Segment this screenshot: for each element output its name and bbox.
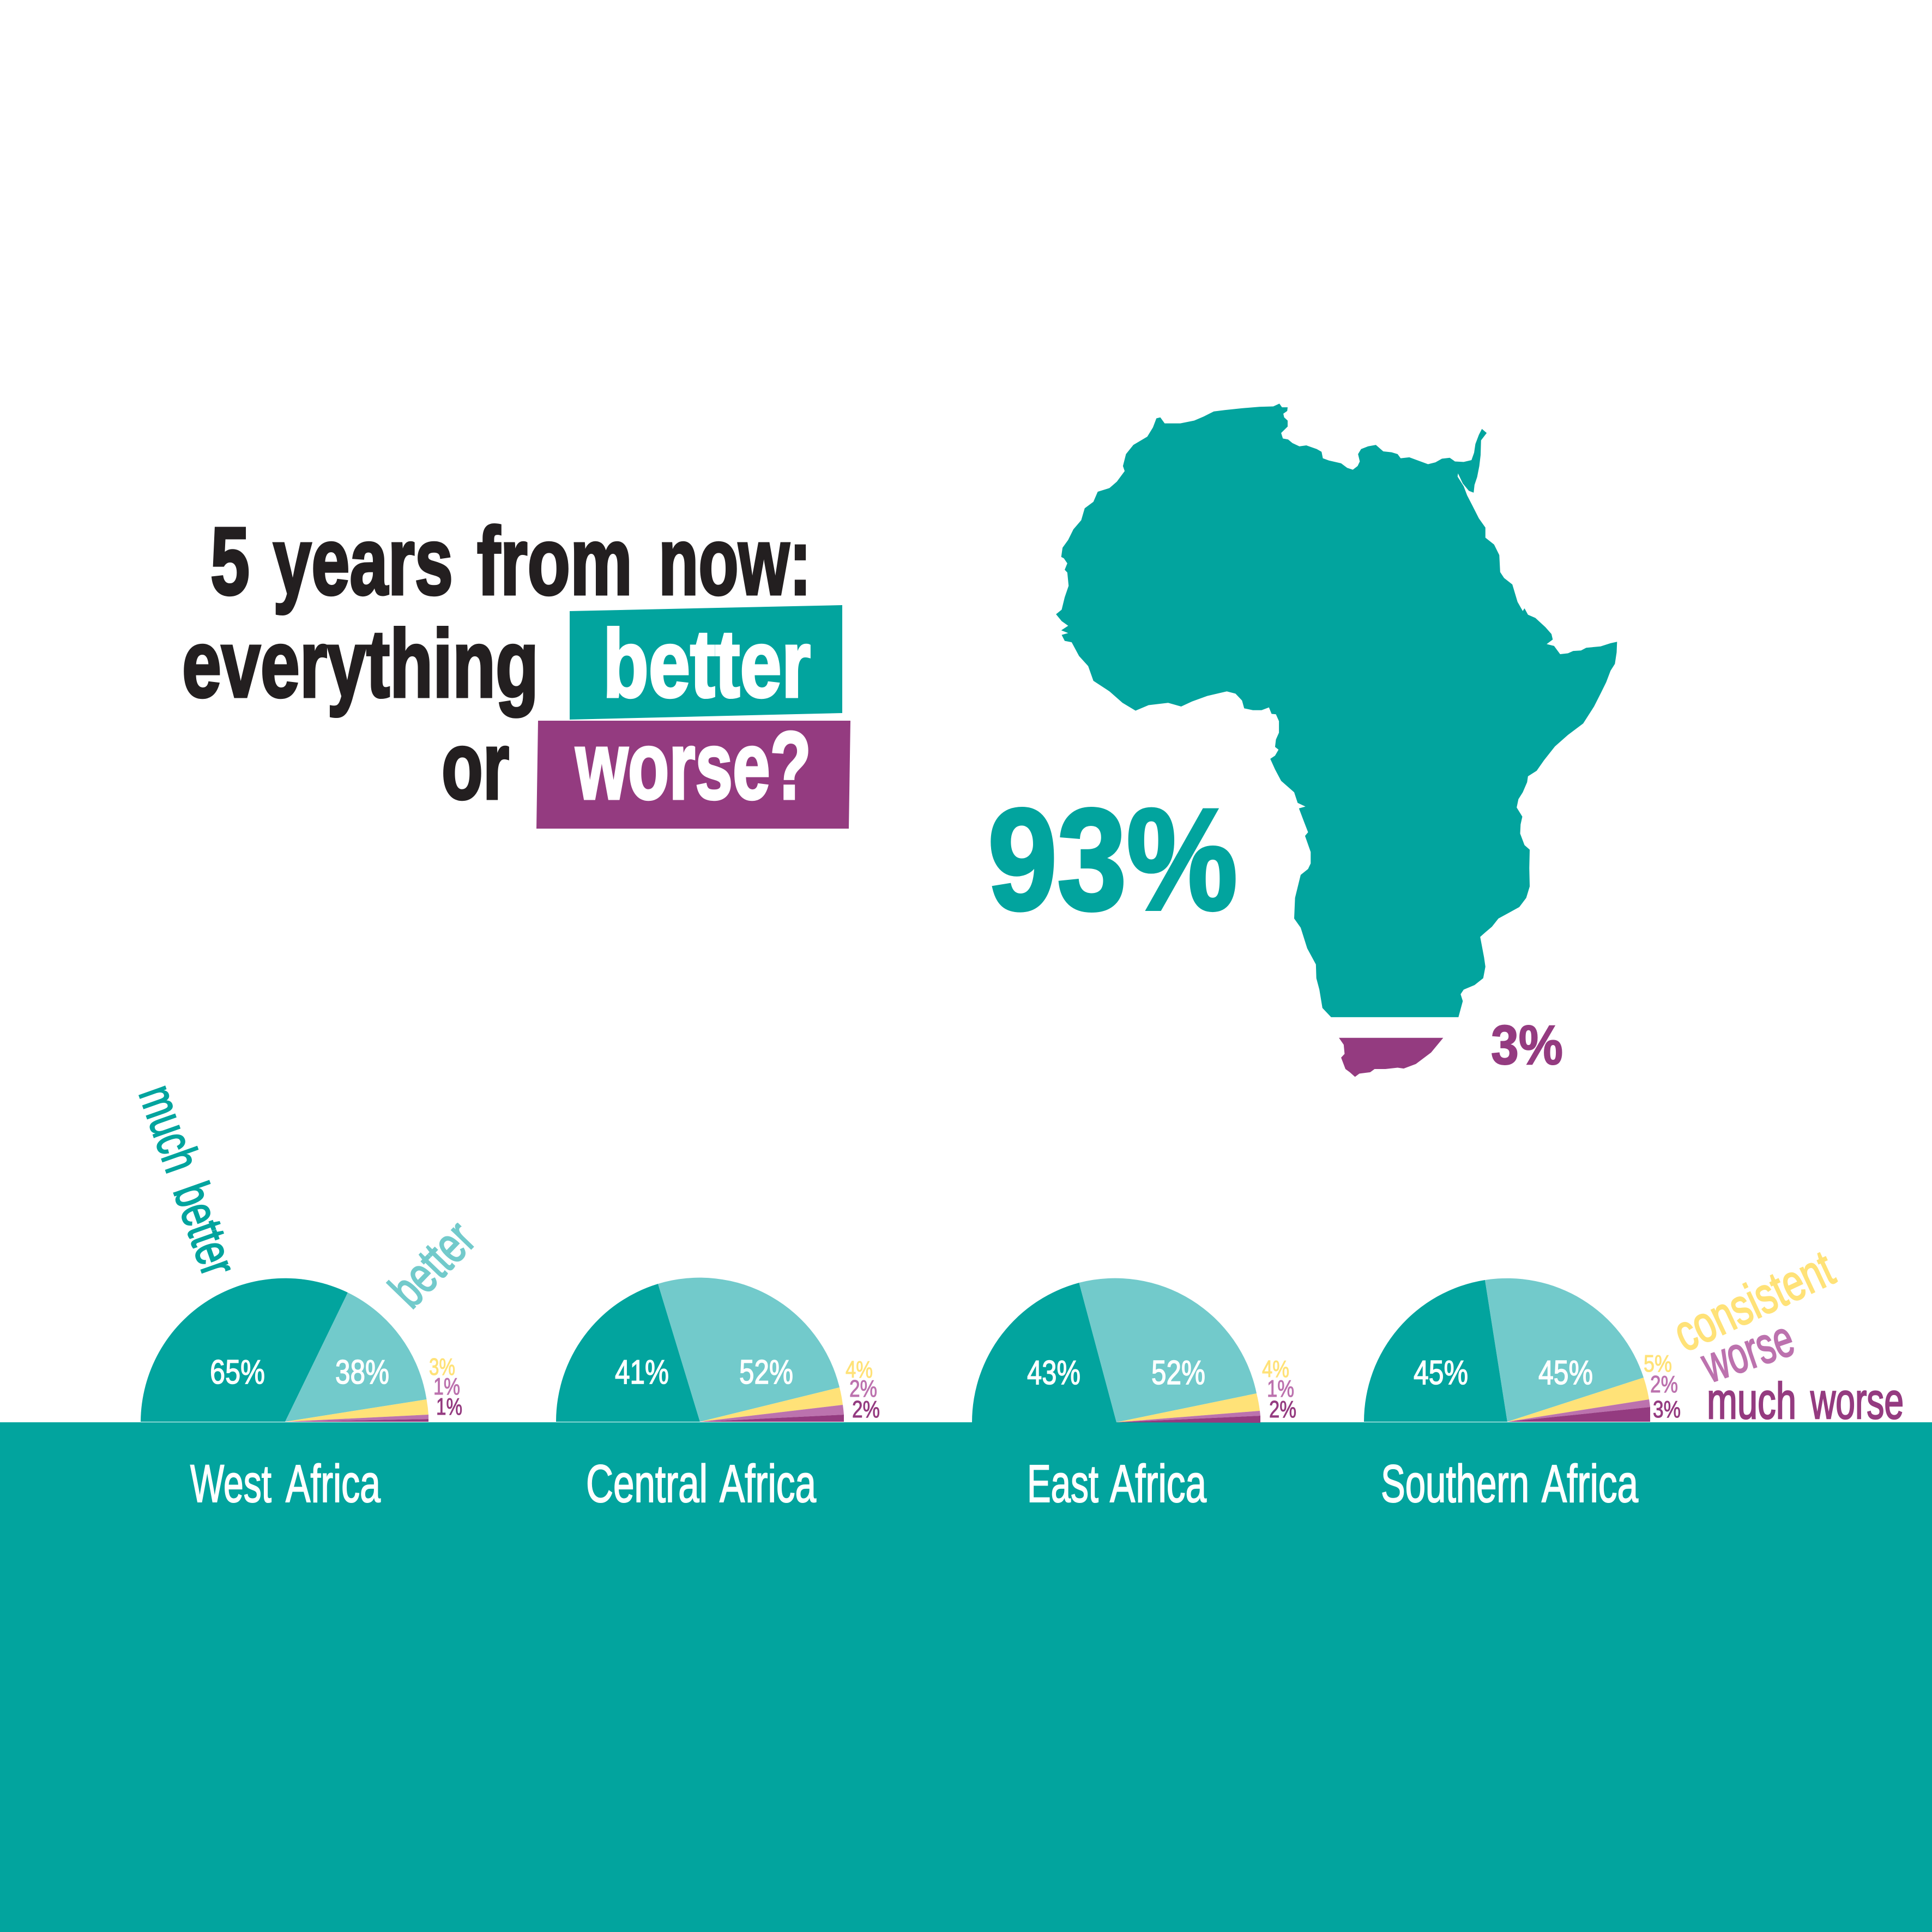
teal ground panel bbox=[0, 1422, 1932, 1932]
legend: consistent: consistent bbox=[1665, 1239, 1842, 1362]
region: Southern Africa: Africa bbox=[1542, 1454, 1638, 1513]
region: East Africa: East bbox=[1027, 1454, 1098, 1513]
pie chart: East Africa bbox=[972, 1278, 1296, 1423]
pie chart: East Africa: 1% bbox=[1267, 1375, 1294, 1402]
pie chart: West Africa: 1% bbox=[436, 1393, 462, 1420]
pie chart: Central Africa: 2% bbox=[852, 1396, 880, 1423]
stat: 93% better: 93% bbox=[988, 779, 1237, 940]
pie chart: East Africa: 4% bbox=[1262, 1356, 1289, 1382]
pie chart: Southern Africa: 3% bbox=[1653, 1396, 1681, 1423]
title line 1: now: bbox=[659, 508, 811, 615]
region: Southern Africa: Southern bbox=[1381, 1454, 1529, 1513]
pie chart: East Africa: 43% bbox=[1027, 1354, 1080, 1392]
pie chart: Southern Africa: 5% bbox=[1644, 1350, 1672, 1377]
title line 1: years bbox=[273, 508, 453, 615]
title line 1: 5 bbox=[210, 508, 250, 615]
legend: much better: better bbox=[163, 1175, 248, 1283]
pie chart: West Africa bbox=[141, 1278, 462, 1422]
pie chart: Central Africa: 52% bbox=[739, 1354, 793, 1391]
map: teal Africa 93% bbox=[1056, 403, 1617, 1017]
region: West Africa: West bbox=[190, 1454, 271, 1513]
title word: everything: everything bbox=[182, 611, 539, 717]
region: Central Africa: Central bbox=[586, 1454, 708, 1513]
pie chart: West Africa: 3% bbox=[429, 1354, 455, 1380]
pie chart: Southern Africa: 2% bbox=[1650, 1371, 1678, 1398]
region: East Africa bbox=[1027, 1454, 1206, 1513]
region: Central Africa: Africa bbox=[720, 1454, 816, 1513]
pie chart: Central Africa: 41% bbox=[615, 1354, 669, 1391]
pie chart: Southern Africa: 45% bbox=[1414, 1354, 1468, 1392]
pie chart: West Africa: 1% bbox=[433, 1373, 460, 1400]
region labels bbox=[190, 1454, 1638, 1513]
stat: 3% worse: 3% bbox=[1491, 1014, 1563, 1076]
map of Africa split by percentage bbox=[988, 403, 1617, 1077]
title line 1 bbox=[210, 508, 811, 615]
pie chart: West Africa: 38% bbox=[335, 1354, 389, 1391]
legend: worse: worse bbox=[1694, 1309, 1801, 1393]
pie chart: East Africa: 52% bbox=[1151, 1354, 1205, 1392]
title bbox=[182, 508, 850, 829]
pie chart: West Africa: 65% bbox=[210, 1354, 265, 1391]
region: East Africa: Africa bbox=[1110, 1454, 1206, 1513]
highlight box: worse bbox=[536, 713, 850, 829]
pie chart: Central Africa: 4% bbox=[846, 1356, 873, 1383]
legend: better: better bbox=[378, 1210, 486, 1318]
map: purple southern tip 3% bbox=[1339, 1038, 1443, 1077]
legend: much better: much bbox=[128, 1078, 212, 1179]
legend: much better bbox=[128, 1078, 248, 1283]
pie chart: Central Africa bbox=[556, 1278, 880, 1423]
region: West Africa: Africa bbox=[286, 1454, 381, 1513]
highlight box: better: better bbox=[603, 611, 811, 717]
title word: or: or bbox=[442, 713, 509, 819]
title line 1: from bbox=[477, 508, 632, 615]
legend: much worse: much bbox=[1707, 1372, 1796, 1429]
highlight box: worse: worse? bbox=[575, 713, 811, 819]
pie chart: Southern Africa: 45% bbox=[1538, 1354, 1593, 1392]
pie chart: Central Africa: 2% bbox=[849, 1375, 877, 1402]
pie chart: Southern Africa bbox=[1364, 1278, 1681, 1423]
pie chart: East Africa: 2% bbox=[1269, 1396, 1296, 1423]
legend labels around the pies bbox=[128, 1078, 1904, 1429]
region: West Africa bbox=[190, 1454, 381, 1513]
legend: much worse bbox=[1707, 1372, 1904, 1429]
